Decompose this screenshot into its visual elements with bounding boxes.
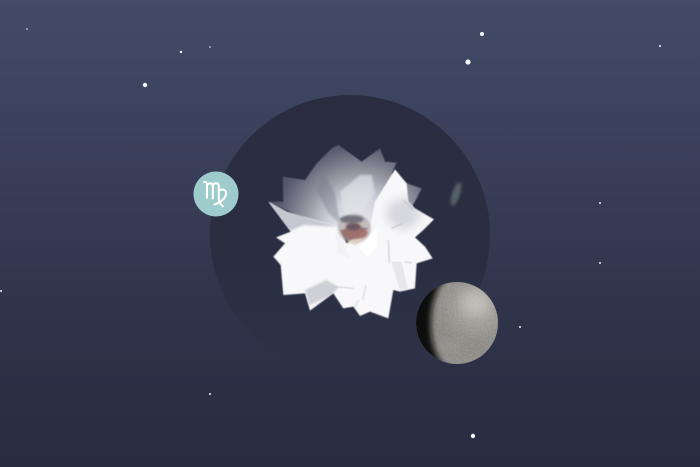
flower bbox=[268, 145, 434, 318]
icon: comet smudge bbox=[448, 181, 464, 207]
upper translucent petals bbox=[268, 145, 422, 230]
white lower petals bbox=[268, 169, 434, 318]
dark circle behind flower bbox=[210, 95, 490, 375]
Virgo glyph bbox=[204, 182, 226, 206]
icon: Virgo zodiac badge bbox=[194, 172, 238, 216]
flower center bbox=[335, 214, 377, 258]
icon: Mercury planet bbox=[416, 282, 498, 364]
shadowed limb bbox=[416, 284, 446, 362]
petal shading bbox=[270, 204, 336, 232]
